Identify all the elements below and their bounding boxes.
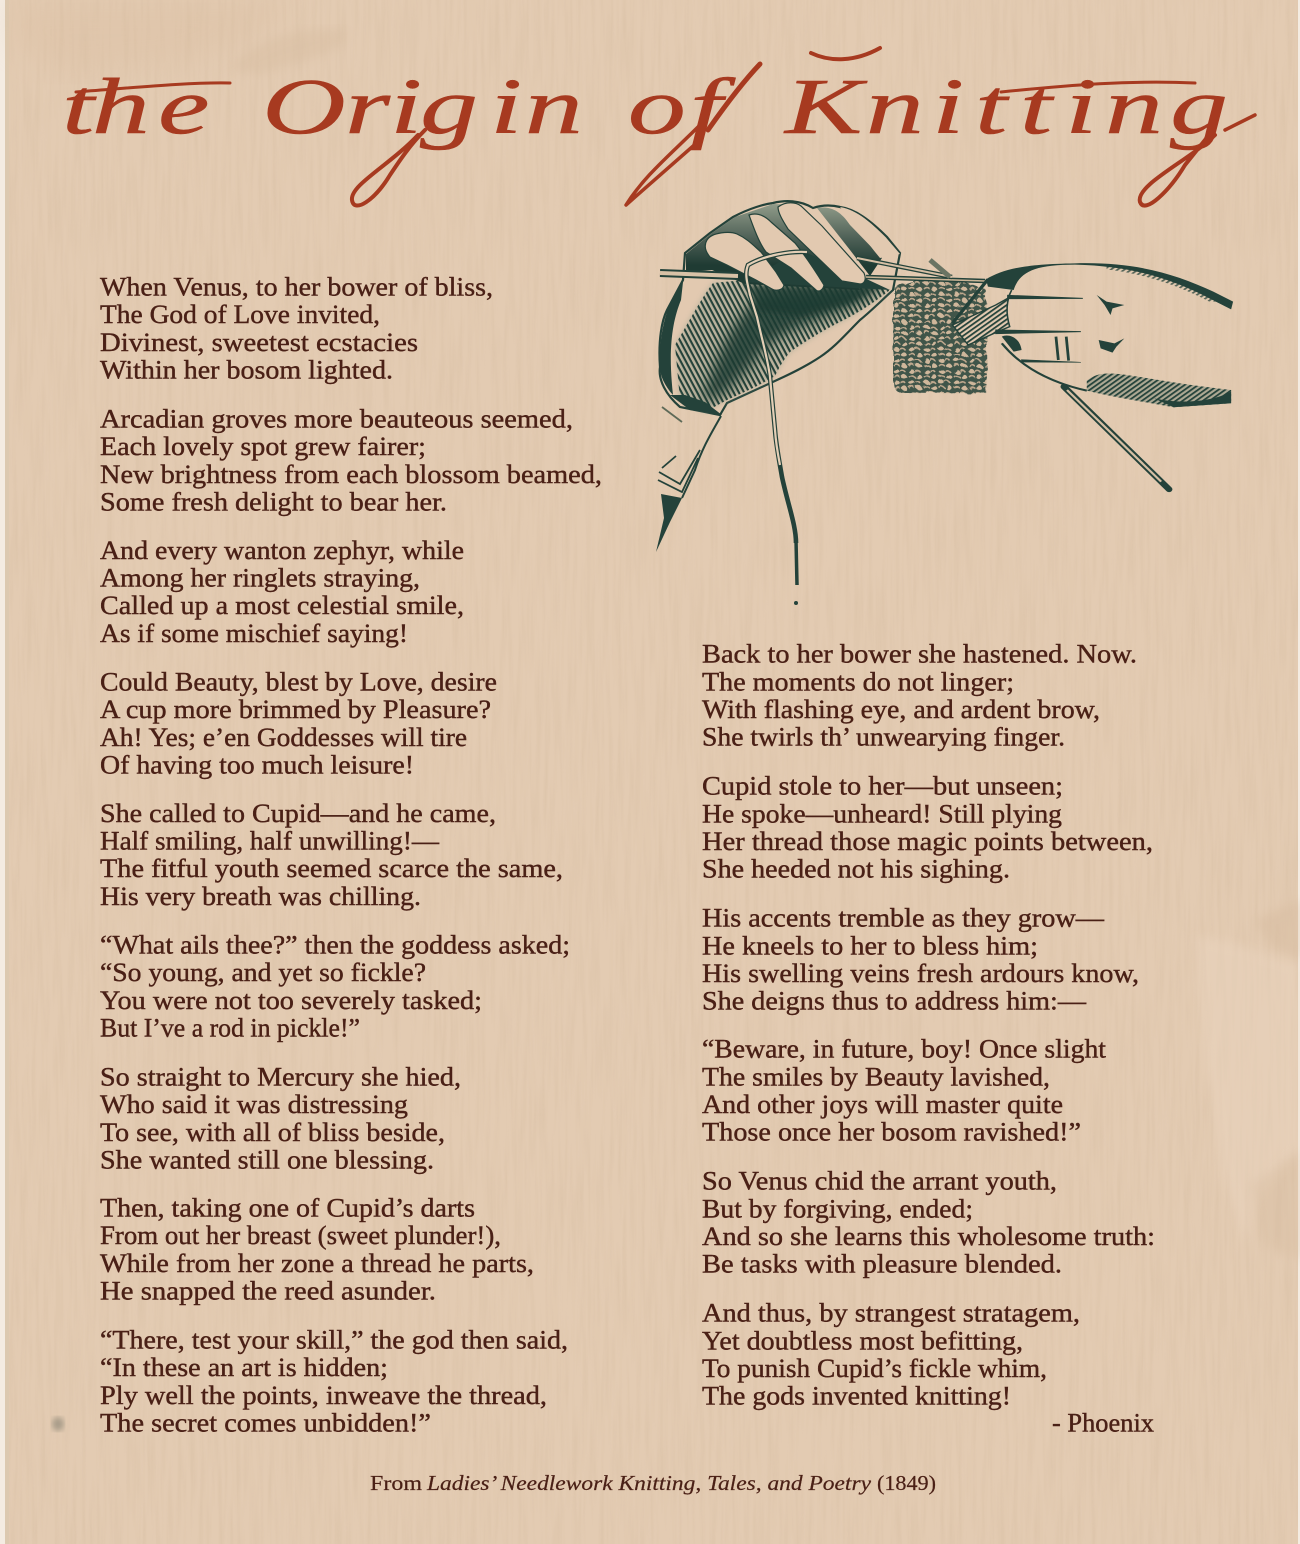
stanza 7 <box>100 1062 461 1174</box>
poem: left column <box>100 272 602 1438</box>
stanza 11: Her thread those magic points between, <box>702 827 1153 856</box>
stanza 4 <box>100 668 497 780</box>
shaded knuckles <box>686 204 860 290</box>
stanza 13: Those once her bosom ravished!” <box>702 1118 1081 1147</box>
stanza 6: You were not too severely tasked; <box>100 986 482 1015</box>
stanza 9 <box>100 1326 568 1438</box>
right needle <box>1064 387 1169 489</box>
title: the Origin of Knitting: Knitting <box>783 62 1228 151</box>
stanza 7: Who said it was distressing <box>100 1090 408 1119</box>
stanza 10: Back to her bower she hastened. Now. <box>702 640 1137 669</box>
stanza 2: New brightness from each blossom beamed, <box>100 460 602 489</box>
stanza 12: His accents tremble as they grow— <box>702 904 1105 933</box>
yarn <box>746 252 807 605</box>
stanza 10: She twirls th’ unwearying finger. <box>702 723 1065 752</box>
stanza 12: He kneels to her to bless him; <box>702 931 1038 960</box>
stanza 8: While from her zone a thread he parts, <box>100 1249 534 1278</box>
stanza 4: Ah! Yes; e’en Goddesses will tire <box>100 723 467 752</box>
stanza 7: To see, with all of bliss beside, <box>100 1118 445 1147</box>
stanza 11: She heeded not his sighing. <box>702 855 1010 884</box>
stanza 8 <box>100 1194 534 1306</box>
source line: From <box>370 1471 422 1495</box>
title: the Origin of Knitting <box>62 48 1255 206</box>
stanza 5: Half smiling, half unwilling!— <box>100 827 440 856</box>
stanza 3 <box>100 536 464 648</box>
title: the Origin of Knitting: of <box>628 62 737 151</box>
stanza 2: Each lovely spot grew fairer; <box>100 432 426 461</box>
stanza 8: Then, taking one of Cupid’s darts <box>100 1194 475 1222</box>
stanza 5: His very breath was chilling. <box>100 882 421 911</box>
knuckle marks <box>1097 295 1124 315</box>
cuff <box>656 407 721 552</box>
stanza 13: “Beware, in future, boy! Once slight <box>702 1035 1107 1064</box>
stanza 12: She deigns thus to address him:— <box>702 987 1087 1016</box>
stanza 4: Could Beauty, blest by Love, desire <box>100 668 497 696</box>
stanza 9: The secret comes unbidden!” <box>100 1408 431 1438</box>
stanza 13 <box>702 1035 1107 1147</box>
stanza 12 <box>702 904 1139 1016</box>
attribution: Phoenix: - Phoenix <box>1052 1409 1154 1438</box>
stanza 8: He snapped the reed asunder. <box>100 1276 436 1306</box>
stanza 5: The fitful youth seemed scarce the same, <box>100 854 563 883</box>
right hand <box>952 263 1233 489</box>
stanza 1: The God of Love invited, <box>100 300 380 329</box>
stanza 6 <box>100 930 570 1042</box>
stanza 4: Of having too much leisure! <box>100 750 414 780</box>
stanza 7: She wanted still one blessing. <box>100 1146 434 1174</box>
ring <box>1056 337 1069 361</box>
source line: (1849) <box>877 1471 936 1495</box>
stanza 10: With flashing eye, and ardent brow, <box>702 695 1100 724</box>
stanza 2 <box>100 404 602 516</box>
stanza 13: And other joys will master quite <box>702 1090 1063 1119</box>
stanza 10 <box>702 640 1137 752</box>
poem: right column <box>702 640 1155 1438</box>
left hand palm <box>659 201 900 415</box>
needles <box>660 258 985 281</box>
stanza 3: Called up a most celestial smile, <box>100 591 464 620</box>
stanza 15: Yet doubtless most befitting, <box>702 1326 1023 1355</box>
stanza 2: Some fresh delight to bear her. <box>100 488 447 516</box>
stanza 1 <box>100 272 493 384</box>
stanza 14: So Venus chid the arrant youth, <box>702 1167 1057 1196</box>
stanza 11: Cupid stole to her—but unseen; <box>702 772 1063 801</box>
stanza 1: When Venus, to her bower of bliss, <box>100 272 493 302</box>
stanza 15: The gods invented knitting! <box>702 1382 1011 1411</box>
illustration: hands knitting <box>656 201 1233 605</box>
stanza 1: Divinest, sweetest ecstacies <box>100 328 418 357</box>
stanza 8: From out her breast (sweet plunder!), <box>100 1221 501 1250</box>
stanza 5: She called to Cupid—and he came, <box>100 799 496 828</box>
stanza 14 <box>702 1167 1155 1279</box>
stanza 13: The smiles by Beauty lavished, <box>702 1062 1050 1091</box>
stanza 6: But I’ve a rod in pickle!” <box>100 1014 360 1042</box>
left hand fingers <box>705 232 784 290</box>
stanza 10: The moments do not linger; <box>702 667 1014 696</box>
stanza 3: And every wanton zephyr, while <box>100 536 464 565</box>
stanza 14: Be tasks with pleasure blended. <box>702 1250 1062 1279</box>
title: the Origin of Knitting: the <box>62 62 210 151</box>
stanza 11: He spoke—unheard! Still plying <box>702 799 1062 828</box>
stanza 12: His swelling veins fresh ardours know, <box>702 959 1139 988</box>
source line: Ladies’ Needlework Knitting, Tales, and Poetry <box>426 1471 872 1495</box>
stanza 15: To punish Cupid’s fickle whim, <box>702 1354 1047 1383</box>
stanza 7: So straight to Mercury she hied, <box>100 1062 461 1092</box>
stanza 9: “In these an art is hidden; <box>100 1353 388 1382</box>
stanza 3: As if some mischief saying! <box>100 619 408 648</box>
stanza 11 <box>702 772 1153 884</box>
stanza 2: Arcadian groves more beauteous seemed, <box>100 404 573 434</box>
stanza 6: “So young, and yet so fickle? <box>100 958 426 987</box>
title flourishes <box>76 48 1255 206</box>
stanza 5 <box>100 799 563 911</box>
stanza 3: Among her ringlets straying, <box>100 564 420 593</box>
stanza 14: And so she learns this wholesome truth: <box>702 1222 1155 1251</box>
stanza 15: And thus, by strangest stratagem, <box>702 1299 1080 1328</box>
stanza 15 <box>702 1299 1080 1411</box>
stanza 14: But by forgiving, ended; <box>702 1194 973 1223</box>
stanza 6: “What ails thee?” then the goddess asked; <box>100 930 570 960</box>
stanza 1: Within her bosom lighted. <box>100 356 393 384</box>
stanza 9: Ply well the points, inweave the thread, <box>100 1381 547 1410</box>
knitted swatch <box>893 280 987 393</box>
title: the Origin of Knitting: Origin <box>262 62 583 151</box>
stanza 4: A cup more brimmed by Pleasure? <box>100 695 491 724</box>
stanza 9: “There, test your skill,” the god then said, <box>100 1326 568 1354</box>
